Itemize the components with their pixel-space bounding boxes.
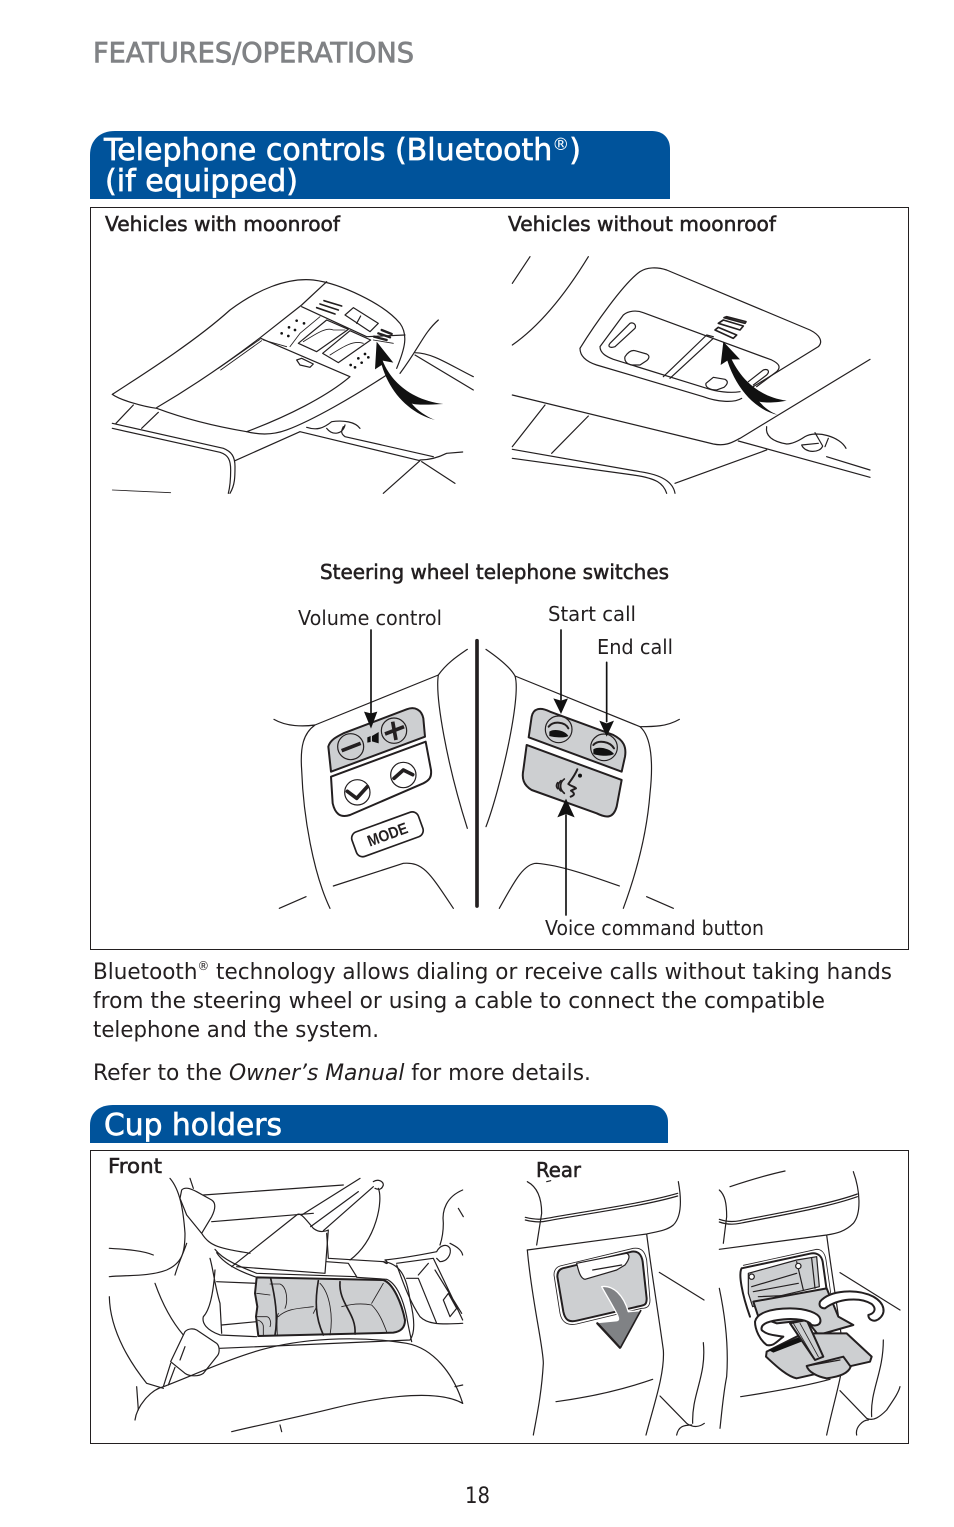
- right spoke: [486, 649, 679, 908]
- illustration: overhead console with moonroof: [112, 280, 473, 493]
- panel: telephone controls diagrams: [90, 208, 908, 950]
- illustration: overhead console without moonroof: [512, 257, 870, 493]
- heading bar: cup holders: [90, 1105, 668, 1143]
- text block: bluetooth description: technology allows dialing or receive calls without taking hands: [209, 960, 892, 985]
- illustration: rear cup holder closed: [525, 1181, 704, 1435]
- label: rear: Rear: [536, 1158, 582, 1182]
- text block: bluetooth description: [93, 959, 892, 1086]
- label: voice command button: Voice command button: [545, 916, 764, 940]
- arrow: start call: [553, 630, 568, 714]
- label: vehicles with moonroof: Vehicles with moonroof: [105, 212, 341, 236]
- label: volume control: Volume control: [298, 606, 442, 630]
- text block: bluetooth description: telephone and the system.: [93, 1018, 379, 1043]
- heading bar: telephone controls: Telephone controls (Bluetooth: [104, 133, 552, 168]
- page number: 18: [465, 1484, 490, 1509]
- left spoke: [274, 649, 467, 908]
- label: front: Front: [108, 1154, 162, 1178]
- panel: cup holders: [90, 1150, 908, 1444]
- illustration: steering wheel switches: [274, 630, 679, 915]
- mode button: MODE: [365, 820, 411, 851]
- text block: bluetooth description: Refer to the Owner’s Manual for more details.: [93, 1061, 591, 1086]
- heading bar: telephone controls: ®: [552, 135, 569, 155]
- text block: bluetooth description: ®: [197, 959, 209, 973]
- heading bar: telephone controls: ): [569, 133, 581, 168]
- mode button: [350, 810, 425, 859]
- divider bar: [471, 641, 482, 906]
- section title: features/operations: FEATURES/OPERATIONS: [93, 36, 414, 69]
- text block: bluetooth description: from the steering wheel or using a cable to connect the compatible: [93, 989, 825, 1014]
- label: start call: Start call: [548, 602, 636, 626]
- heading bar: telephone controls: (if equipped): [105, 164, 298, 199]
- arrow: end call: [599, 662, 614, 737]
- heading bar: telephone controls: [90, 131, 670, 199]
- arrow: voice command: [557, 799, 575, 915]
- illustration: rear cup holder open: [719, 1171, 900, 1435]
- arrow: volume control: [364, 630, 377, 729]
- illustration: front cup holders: [109, 1178, 463, 1432]
- heading bar: cup holders: Cup holders: [104, 1108, 282, 1143]
- heading: steering wheel telephone switches: Steering wheel telephone switches: [320, 560, 669, 584]
- label: end call: End call: [597, 635, 673, 659]
- label: vehicles without moonroof: Vehicles without moonroof: [508, 212, 777, 236]
- text block: bluetooth description: Bluetooth: [93, 960, 200, 985]
